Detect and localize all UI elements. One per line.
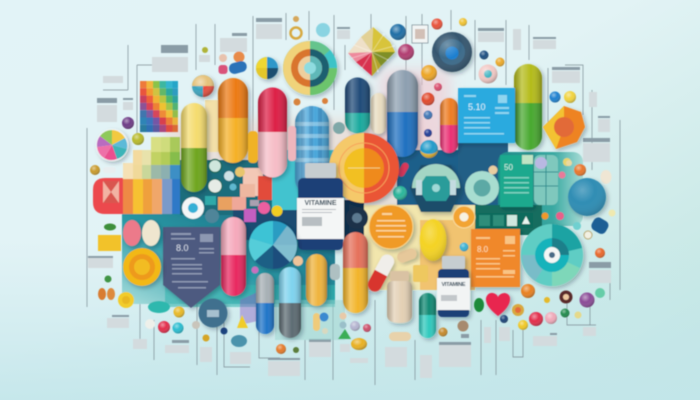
capsule: cream <box>371 93 386 134</box>
backdrop: soft color wash <box>165 70 450 220</box>
yellow block <box>98 235 121 251</box>
color grid: stepped swatches <box>123 137 180 214</box>
capsule: golden <box>306 254 327 306</box>
capsule: red and pink <box>258 88 287 178</box>
capsule: light blue and charcoal <box>279 267 301 338</box>
dark icon row <box>477 213 533 228</box>
beige bottle <box>387 271 412 323</box>
tilted tan pill <box>396 247 418 264</box>
pleated fan chart <box>348 27 395 76</box>
tile cluster right <box>488 155 572 205</box>
pie wheel left <box>96 129 128 161</box>
green info panel: 50 <box>504 163 513 172</box>
small pale dial tiles in the center <box>182 122 368 229</box>
orange info panel: 8.0 <box>477 245 489 254</box>
yellow oval tablet <box>420 219 446 261</box>
vitamin bottle small <box>437 256 470 317</box>
loose pills upper middle <box>390 18 612 200</box>
capsule: yellow and green <box>181 103 207 192</box>
shield info panel: 8.0 <box>176 243 189 253</box>
shield info panel <box>163 227 220 308</box>
orange diamond chart <box>543 106 585 149</box>
backdrop: teal and navy blocks <box>122 143 583 340</box>
navy round badge <box>432 32 472 72</box>
capsule: red and yellow <box>343 232 368 313</box>
orange info panel <box>471 229 520 287</box>
red rounded tile with envelope icon <box>93 178 123 214</box>
blue info panel: 5.10 <box>468 102 486 112</box>
heart <box>486 293 510 316</box>
loose pills lower left <box>98 224 340 354</box>
vitamin bottle large <box>297 163 344 250</box>
half-and-half ball <box>256 57 278 79</box>
capsule: tilted red and white <box>365 252 397 294</box>
blue plaid capsule <box>295 106 329 196</box>
large orange and red target <box>329 133 399 203</box>
capsule: grey and blue <box>387 70 418 157</box>
target donut chart <box>283 41 337 95</box>
capsule: green and teal <box>419 293 436 338</box>
teal pie disc <box>249 221 297 269</box>
capsule: pink and red <box>221 217 246 296</box>
eggs: pink and white <box>123 220 160 246</box>
teal segmented target <box>521 224 583 286</box>
color grid: top left <box>140 81 178 132</box>
orange round info badge <box>369 205 413 249</box>
teal hexagon dial <box>410 164 462 212</box>
multicolored ball <box>192 75 214 97</box>
yellow coin <box>123 248 161 286</box>
ring and decorative top icons <box>290 16 330 106</box>
vitamin bottle large: VITAMINE <box>304 200 337 207</box>
capsule: grey and blue small <box>256 273 274 334</box>
capsule: olive and green <box>514 64 542 150</box>
green info panel <box>500 155 533 207</box>
blue info panel <box>458 88 515 143</box>
vitamin bottle small: VITAMINE <box>442 282 466 288</box>
loose pills right <box>338 210 616 350</box>
guide lines <box>87 10 620 385</box>
capsule: orange and yellow <box>218 78 248 163</box>
small stacked tablets <box>248 126 296 163</box>
blue grey info button <box>198 298 228 328</box>
capsule: navy and teal <box>345 78 370 134</box>
loose pills upper left <box>90 47 248 175</box>
pale teal ring <box>465 171 499 205</box>
capsule: orange and pink <box>440 98 458 153</box>
steel blue disc <box>568 178 606 216</box>
tan pill bottom <box>389 332 411 341</box>
orange ring badge <box>453 206 475 228</box>
text blocks: blurred captions <box>88 18 611 378</box>
